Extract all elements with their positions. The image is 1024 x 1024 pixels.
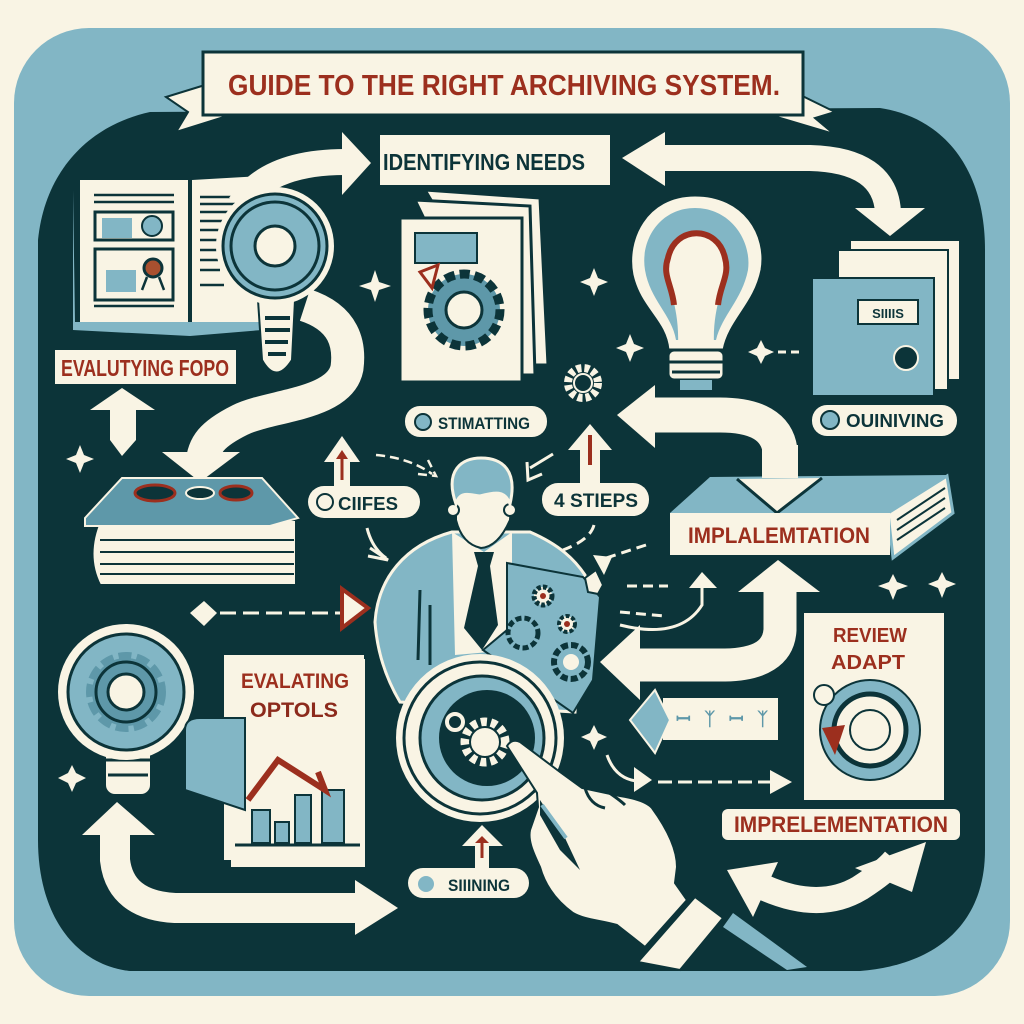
pill: siiining: SIIINING <box>448 876 510 895</box>
pill: stimating <box>405 406 547 437</box>
icon: open book <box>73 176 262 336</box>
icon: file folders <box>812 240 960 396</box>
dashed arrow: towards head right <box>527 454 553 480</box>
icon: document stack with gear <box>400 190 548 382</box>
label: identifying needs <box>380 135 610 185</box>
arrow: small up <box>620 586 702 630</box>
dashed arrow: towards head left <box>376 455 436 476</box>
icon: report with chart: OPTOLS <box>250 699 338 722</box>
arrowhead: mid right left <box>600 625 640 700</box>
arrowhead: small up <box>689 572 717 588</box>
icon: light bulb <box>631 195 763 390</box>
icon: big magnifier with gear <box>396 654 564 822</box>
title banner <box>166 52 835 134</box>
arrowhead: S curve <box>162 452 240 482</box>
arrow: up <box>90 388 155 456</box>
arrow: down to figure left <box>367 528 388 560</box>
panel: review adapt <box>804 613 944 800</box>
icon: gear bulb <box>58 624 194 795</box>
pill: 4 steps: 4 STIEPS <box>554 491 638 512</box>
label: imprelementation: IMPRELEMENTATION <box>734 812 948 837</box>
icon: thick open book: IMPLALEMTATION <box>688 523 870 548</box>
arrowhead: upper right <box>617 385 655 448</box>
icon: pointing hand <box>507 741 807 970</box>
arrow: bottom right curve <box>765 860 895 900</box>
arrowhead: bottom right up <box>855 842 926 892</box>
arrowhead: top left-pointing <box>622 132 665 186</box>
pill: cliffes: CIIFES <box>338 494 398 514</box>
arrow: top right curve <box>660 158 888 212</box>
arrowhead: mid right up <box>738 560 820 592</box>
arrowhead: towards hand <box>593 555 612 575</box>
arrowhead: top right downward <box>855 208 925 236</box>
icon: flat stacked book <box>85 478 298 585</box>
label: identifying needs: IDENTIFYING NEEDS <box>383 149 585 175</box>
pill: cliffes <box>308 486 420 518</box>
arrow: blue pointer with label: ꟷ ᛉ ꟷ ᛉ <box>676 709 768 729</box>
arrow: dashed red triangle left <box>190 589 368 628</box>
arrow: long S curve <box>202 305 348 465</box>
arrow: dashed right <box>607 755 792 794</box>
dashed connectors around figure <box>563 525 668 616</box>
arrowhead: bottom left up <box>82 802 155 835</box>
pill: ouiniving <box>812 405 957 436</box>
arrowhead: bottom right left <box>727 862 778 917</box>
arrow: red up bottom <box>462 825 503 870</box>
icon: report with chart <box>185 655 366 868</box>
pill: siiining <box>408 868 529 898</box>
arrow: blue pointer with label <box>630 690 778 753</box>
icon: file folders: SIIIIS <box>872 306 904 321</box>
label: evaluating fopo <box>55 350 236 384</box>
arrow: red up left <box>324 436 360 486</box>
icon: small gear <box>568 368 598 398</box>
dashed connector <box>778 350 802 354</box>
pill: stimating: STIMATTING <box>438 414 530 433</box>
arrowhead: top left <box>342 132 371 195</box>
sparkles <box>58 268 956 792</box>
arrowhead: bottom left right <box>355 880 398 935</box>
icon: magnifying glass <box>216 187 334 372</box>
icon: thick open book <box>670 445 953 558</box>
arrow: upper right curve <box>650 415 780 480</box>
arrow: bottom left curve <box>115 835 365 908</box>
label: evaluating fopo: EVALUTYING FOPO <box>61 355 229 381</box>
arrow: mid right curve <box>635 590 780 665</box>
pill: ouiniving: OUINIVING <box>846 411 944 431</box>
icon: report with chart: EVALATING <box>241 670 349 693</box>
panel: review adapt: ADAPT <box>831 652 905 674</box>
panel: review adapt: REVIEW <box>833 625 907 647</box>
title banner: GUIDE TO THE RIGHT ARCHIVING SYSTEM. <box>228 70 780 102</box>
arrow: top left curve <box>240 162 345 205</box>
pill: 4 steps <box>542 483 649 516</box>
arrow: red up right <box>568 424 612 486</box>
figure: person in suit <box>375 458 603 713</box>
panel: dark centre <box>38 108 985 971</box>
